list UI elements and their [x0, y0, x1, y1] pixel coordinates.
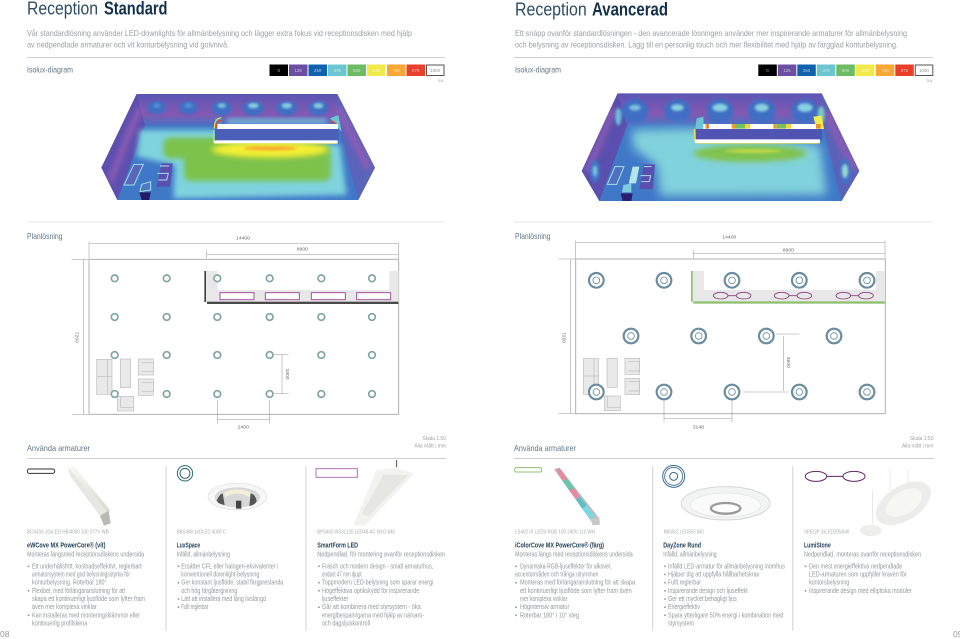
right scale note: [902, 436, 934, 450]
product: eWCove: Flexibel, med förlängaranslutning för att: [32, 586, 125, 595]
product: iColorCove: Högintensiv armatur: [520, 602, 570, 611]
right intro text: [515, 29, 907, 50]
left lux legend: 250: [314, 68, 322, 73]
right lux legend: 0: [766, 68, 769, 73]
product: LumiStone: kontorsbelysning: [809, 578, 849, 587]
right scale note: Alla mått i mm: [902, 442, 934, 450]
left isolux heading: Isolux-diagram: [27, 64, 73, 74]
page number 08: 08: [0, 629, 10, 639]
left lux legend: 875: [412, 68, 420, 73]
right lux legend: 1000: [919, 68, 929, 73]
product: SmartForm LED: ljuseffekter: [322, 594, 349, 603]
product: iColorCove: Roterbar 180° i 10° steg: [520, 610, 579, 619]
product: SmartForm LED: och dagsljuskontroll: [322, 618, 370, 628]
product: DayZone Rund: Fullt reglerbar: [668, 578, 701, 587]
product: eWCove: även mer komplexa vinklar: [32, 602, 97, 611]
right isolux heat map: [582, 93, 859, 201]
right page title: Avancerad: [592, 0, 668, 20]
left lux legend: 750: [393, 68, 400, 73]
left luminaires heading: Använda armaturer: [27, 443, 90, 453]
product: SmartForm LED: Går att kombinera med styrsystem - öka: [322, 602, 421, 611]
dimensions: 3148: [693, 424, 704, 430]
dimensions: 8900: [297, 246, 308, 252]
product: DayZone Rund: [663, 465, 785, 628]
product: LumiStone: SP522P 3xLED205/840: [804, 530, 849, 536]
left scale note: [414, 436, 446, 450]
right intro text: och belysning av receptionsdisken. Lägg till en personlig touch och mer flexibilitet med hjälp av färgglad konturbelysning.: [515, 40, 898, 50]
dimensions: 1800: [284, 368, 290, 380]
right lux legend: 250: [803, 68, 811, 73]
product: SmartForm LED: SmartForm LED: [317, 540, 358, 550]
left floor plan heading: Planlösning: [27, 231, 63, 241]
product: DayZone Rund: Energieffektiv: [668, 602, 700, 611]
right lux legend: 125: [783, 68, 791, 73]
downlights: [111, 275, 375, 397]
left lux legend: 375: [334, 68, 341, 73]
product: iColorCove: iColorCove MX PowerCore® (färg): [515, 540, 604, 550]
right floor plan heading: Planlösning: [515, 231, 551, 241]
left lux legend: 625: [373, 68, 380, 73]
product: LumiStone: Nedpendlad, monteras ovanför receptionsdisken: [804, 550, 921, 558]
left lux legend: 0: [277, 68, 280, 73]
dimensions: 2400: [238, 424, 249, 430]
product: LuxSpace: Infälld, allmänbelysning: [177, 550, 230, 558]
product: DayZone Rund: Infälld, allmänbelysning: [663, 550, 717, 558]
product: eWCove: BCX416 10xLED HB/4000 100 277V WB: [27, 530, 109, 536]
right scale note: Skala 1:50: [910, 436, 934, 442]
left intro text: Vår standardlösning använder LED-downlights för allmänbelysning och lägger extra fokus vid receptionsdisken med hjälp: [27, 28, 412, 38]
dimensions: [72, 235, 398, 430]
dimensions: 8900: [783, 248, 794, 254]
furniture: [97, 359, 153, 411]
left isolux heat map: [101, 94, 375, 200]
product: iColorCove: ett kontinuerligt ljusflöde som lyfter fram även: [520, 586, 632, 595]
right lux legend: lux: [927, 78, 933, 83]
left scale note: Alla mått i mm: [414, 442, 446, 450]
product: eWCove: eWCove MX PowerCore® (vit): [27, 540, 106, 550]
product: SmartForm LED: Nedpendlad, för montering ovanför receptionsdisken: [317, 550, 445, 558]
product: iColorCove: LS402 IX LED3 RGB 100 240V 110 WH: [515, 530, 595, 536]
left lux legend: 125: [295, 68, 302, 73]
product: SmartForm LED: Fräsch och modern design - smalt armaturhus,: [322, 561, 433, 570]
left lux legend: 1000: [430, 68, 441, 73]
product: SmartForm LED: Toppmodern LED-belysning som sparar energi: [322, 578, 434, 587]
product: LuxSpace: BBS498 1xDLED 4000 C: [177, 530, 226, 536]
product: eWCove: Monteras längsmed receptionsdiskens undersida: [27, 550, 145, 558]
product: DayZone Rund: Infälld LED-armatur för allmänbelysning inomhus: [668, 561, 785, 570]
right page title: [515, 0, 668, 20]
right lux legend: 875: [901, 68, 909, 73]
product: eWCove: kontinuerlig profilskena: [32, 618, 88, 628]
product: iColorCove: mer komplexa vinklar: [520, 594, 568, 603]
dimensions: [558, 234, 885, 430]
product: LuxSpace: Fullt reglerbar: [181, 602, 209, 611]
right isolux heading: Isolux-diagram: [515, 64, 561, 74]
product: LumiStone: Inspirerande design med elliptiska moduler: [809, 586, 912, 595]
product: iColorCove: Monteras längs med receptionsdiskens undersida: [515, 550, 633, 558]
furniture: [583, 358, 640, 411]
dimensions: 14400: [236, 235, 250, 241]
left floor plan: [72, 235, 399, 430]
product: eWCove: skapa ett kontinuerligt ljusflöde som lyfter fram: [32, 594, 145, 603]
product: LumiStone: LumiStone: [804, 540, 831, 550]
left scale note: Skala 1:50: [422, 436, 446, 442]
product: eWCove: armatursystem med god belysningsstyrka för: [32, 570, 130, 578]
product: SmartForm LED: BPS460 W33L120 LED48-AC MLO 840: [317, 530, 395, 536]
left intro text: [27, 28, 412, 50]
left lux legend: lux: [438, 78, 444, 83]
product: SmartForm LED: energibesparingarna med hjälp av närvaro-: [322, 610, 424, 619]
right lux legend: 375: [822, 68, 830, 73]
product: LumiStone: Den mest energieffektiva nedpendlade: [809, 561, 902, 570]
left intro text: av nedpendlade armaturer och vit konturbelysning vid golvnivå.: [27, 40, 229, 50]
product: eWCove: Ett underhållsfritt, kostnadseffektivt, reglerbart: [32, 561, 142, 570]
product: SmartForm LED: Högeffektiva optikskydd för inspirerande: [322, 586, 419, 595]
product: DayZone Rund: Inspirerande design och ljuseffekt: [668, 586, 748, 595]
right page title: Reception: [515, 0, 587, 20]
product: iColorCove: [515, 467, 636, 619]
product: LuxSpace: konventionell downlight-belysning: [181, 570, 259, 578]
product: LuxSpace: Ger konstant ljusflöde, stabil färgprestanda: [181, 578, 284, 587]
product: LuxSpace: LuxSpace: [177, 540, 200, 550]
right intro text: Ett snäpp ovanför standardlösningen - den avancerade lösningen använder mer inspirerande armaturer för allmänbelysning: [515, 29, 907, 38]
dimensions: 7200: [561, 332, 567, 343]
product: DayZone Rund: Spara ytterligare 50% energi i kombination med: [668, 610, 783, 619]
product: LumiStone: LED-armaturen som uppfyller kraven för: [809, 570, 907, 578]
product: LuxSpace: och hög färgåtergivning: [181, 586, 237, 595]
left lux legend: 500: [353, 68, 361, 73]
product: SmartForm LED: [316, 460, 445, 628]
dimensions: 7200: [74, 332, 80, 343]
right lux legend: 750: [881, 68, 889, 73]
right lux legend: [758, 64, 933, 83]
product: iColorCove: Monteras med förlängaranslutning för att skapa: [520, 578, 636, 587]
product: eWCove: [27, 466, 145, 628]
right floor plan: [558, 234, 885, 430]
product: iColorCove: accentområden och trånga utrymmen: [515, 570, 598, 578]
product: DayZone Rund: Hjälper dig att uppfylla hållbarhetskrav: [668, 570, 760, 578]
downlights: [589, 273, 874, 399]
product: eWCove: Kan installeras med monteringsklämmor eller: [32, 610, 140, 619]
left lux legend: [270, 64, 444, 83]
product: LuxSpace: Lätt att installera med lång livslängd: [181, 594, 266, 603]
product: LumiStone: [804, 469, 939, 595]
product: iColorCove: Dynamiska RGB-ljuseffekter för alkover,: [520, 561, 612, 570]
product: DayZone Rund: BBS561 LED55S 840: [664, 530, 704, 536]
left page title: [27, 0, 168, 18]
right lux legend: 625: [861, 68, 869, 73]
product: LuxSpace: [177, 466, 284, 611]
product: eWCove: konturbelysning. Roterbar 180°: [32, 578, 107, 587]
product: DayZone Rund: Ger ett mycket behagligt ljus: [668, 594, 737, 603]
dimensions: 3600: [785, 357, 791, 368]
reception counter: [691, 271, 885, 304]
dimensions: 14400: [722, 234, 736, 240]
right lux legend: 500: [842, 68, 850, 73]
product: LuxSpace: Ersätter CFL eller halogen-ekvivalenter i: [181, 561, 279, 570]
product: DayZone Rund: DayZone Rund: [663, 540, 701, 550]
product: SmartForm LED: endast 47 mm djupt: [322, 570, 362, 578]
right luminaires heading: Använda armaturer: [514, 443, 576, 453]
reception counter: [204, 271, 399, 304]
product: DayZone Rund: styrsystem: [668, 618, 694, 628]
